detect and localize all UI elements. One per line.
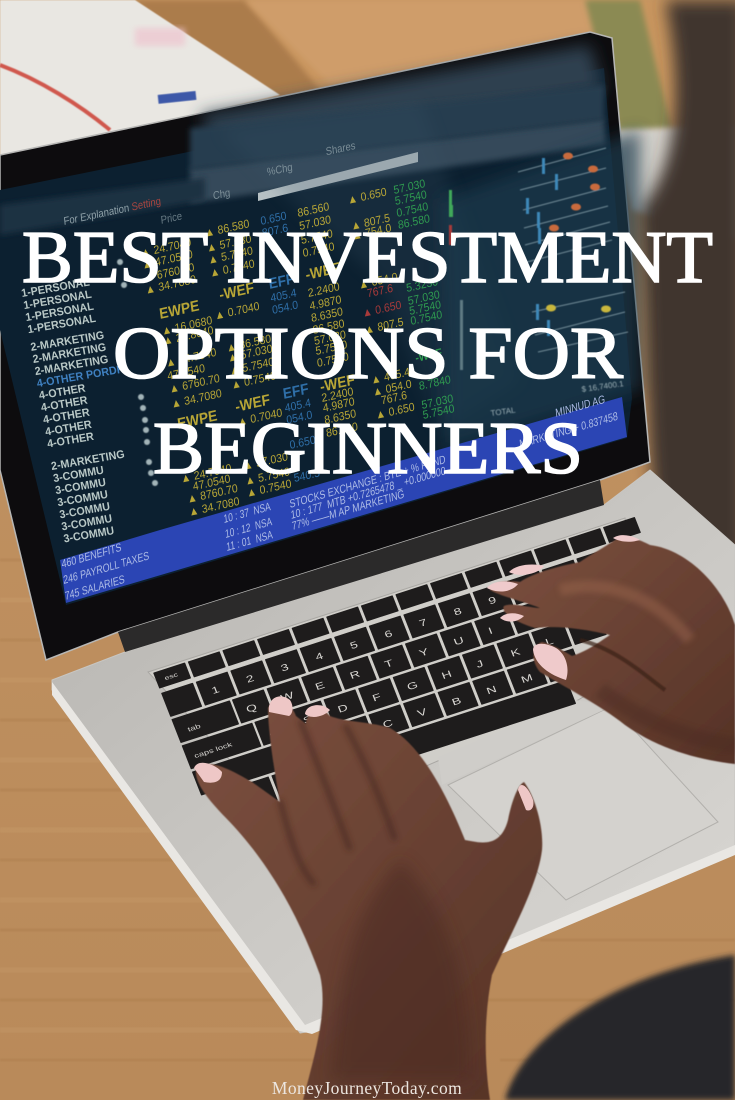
yellow figures: 8.6350: [310, 306, 344, 325]
header strip: [190, 118, 606, 203]
yellow figures: ▲ 5.7540: [244, 466, 291, 488]
blue ticker band: [60, 397, 627, 603]
yellow figures: ▲ 0.7540: [209, 258, 255, 280]
key letters: [163, 551, 589, 788]
account labels: 1-PERSONAL: [27, 313, 97, 336]
blurred dark hair at right: [640, 0, 735, 570]
green figures: [393, 178, 455, 422]
yellow figures: ▲ 0.650: [347, 186, 387, 207]
account labels: 4-OTHER: [42, 406, 91, 427]
bottom ticker text: 460 BENEFITS: [61, 542, 122, 571]
base front edge: [52, 682, 735, 1034]
title line 2: OPTIONS FOR: [113, 313, 624, 395]
green figures: 8.7840: [418, 374, 452, 393]
header labels: Chg: [212, 187, 231, 203]
account labels: 3-COMMU: [63, 525, 115, 546]
yellow figures: ▲ 86.580: [226, 333, 272, 355]
account labels: [20, 273, 151, 546]
yellow figures: 86.580: [325, 421, 359, 440]
yellow figures: ▲ 57.030: [206, 233, 252, 255]
bottom ticker text: 11 : 01 NSA: [226, 529, 274, 554]
yellow figures: ▲ 47.0540: [141, 248, 193, 272]
yellow figures: 2.2400: [321, 386, 354, 405]
right hand: [487, 535, 735, 764]
laptop base: [52, 470, 735, 1034]
title line 1: BEST INVESTMENT: [22, 217, 713, 299]
yellow figures: ▲ 24.7040: [140, 236, 192, 260]
account labels: 2-MARKETING: [30, 329, 105, 354]
yellow figures: EWPE: [176, 408, 219, 433]
yellow figures: ▲ 6760.70: [168, 372, 221, 396]
screen top bezel reflection: [200, 45, 603, 160]
yellow figures: ▲ 0.7040: [214, 300, 260, 323]
account labels: 1-PERSONAL: [20, 276, 91, 300]
bottom ticker text: MARKETING + 0.837458: [519, 411, 619, 451]
yellow figures: ▲ 0.650: [375, 401, 415, 422]
yellow figures: 57.030: [298, 214, 332, 233]
yellow figures: 2.2400: [307, 281, 340, 300]
finger shadows: [280, 720, 395, 885]
yellow figures: ▲ 054.0: [372, 378, 412, 399]
account labels: 4-OTHER: [46, 431, 95, 451]
account labels: 3-COMMU: [56, 489, 109, 509]
yellow figures: ▲ 754.0: [351, 222, 392, 243]
yellow figures: [140, 186, 415, 520]
scroll bar: [258, 152, 418, 201]
blue figures: 405.4: [284, 397, 312, 415]
keyboard well: [148, 518, 642, 825]
yellow figures: ▲ 807.5: [364, 316, 404, 337]
yellow figures: ▲ 054.0: [358, 271, 398, 292]
screen dots column: [117, 259, 158, 486]
yellow figures: ▲ 16.0680: [161, 314, 213, 338]
yellow figures: 4.9870: [309, 294, 342, 313]
yellow figures: -WEF: [305, 260, 341, 284]
yellow figures: EWPE: [158, 298, 201, 323]
account labels: 4-OTHER: [40, 394, 89, 414]
yellow figures: 4.9870: [322, 396, 355, 415]
bottom ticker text: 10 : 12 NSA: [225, 516, 273, 541]
left hand: [194, 696, 542, 1100]
white notebook paper: [0, 0, 280, 160]
account labels: 3-COMMU: [52, 464, 105, 485]
yellow figures: ▲ 0.7040: [237, 407, 283, 429]
yellow figures: 47.0540: [192, 473, 231, 494]
yellow figures: ▲ 34.7080: [188, 495, 240, 519]
hinge strip: [118, 480, 604, 652]
blue figures: 054.0: [286, 409, 313, 427]
bottom ticker text: 10 : 177 MTB +0.7265478 _ +0.000000: [290, 465, 446, 522]
account labels: 3-COMMU: [59, 501, 111, 521]
yellow figures: ▲ 5.7540: [207, 245, 254, 267]
yellow figures: ▲ 405.4: [370, 366, 411, 387]
header labels: Price: [160, 211, 183, 227]
blue figures: EFF: [268, 271, 295, 293]
yellow figures: ▲ 6760.70: [143, 261, 195, 285]
blue figures: EFF: [282, 381, 310, 403]
blue figures: 807.6: [261, 222, 289, 240]
yellow figures: 86.580: [312, 318, 345, 337]
bottom ticker text: 246 PAYROLL TAXES: [63, 550, 150, 587]
green figures: 0.7540: [396, 201, 429, 220]
green figures: 57.030: [421, 393, 454, 412]
header labels: [62, 140, 359, 247]
yellow figures: ▲ 57.030: [227, 343, 273, 365]
account labels: 2-MARKETING: [50, 448, 126, 473]
yellow figures: 86.560: [297, 201, 330, 220]
yellow figures: ▲ 8760.70: [186, 482, 239, 506]
keyboard keys: [154, 518, 692, 821]
dark sleeve at bottom right: [505, 955, 735, 1100]
yellow figures: 57.030: [313, 329, 347, 348]
yellow figures: 0.7540: [302, 241, 335, 260]
bottom ticker text: [61, 391, 619, 603]
yellow figures: -WEF: [319, 372, 356, 396]
bottom ticker text: MINNUD AG: [555, 394, 606, 420]
account labels: 4-OTHER PORDF: [36, 363, 124, 390]
green figures: 5.7540: [422, 403, 455, 422]
account labels: 4-OTHER: [38, 382, 86, 402]
yellow figures: -WEF: [218, 280, 255, 304]
blue figures: 0.650: [260, 210, 287, 228]
website footer: MoneyJourneyToday.com: [272, 1078, 462, 1098]
yellow figures: ▲ 20.8040: [162, 324, 214, 348]
background: blurred desk objects: [0, 0, 735, 240]
screen data: stock table: [20, 140, 619, 603]
green figures: 5.7540: [409, 299, 442, 318]
header labels: Shares: [325, 140, 356, 158]
yellow figures: ▲ 0.650: [361, 299, 402, 320]
account labels: 1-PERSONAL: [25, 300, 95, 324]
yellow figures: ▲ 5.7540: [229, 356, 275, 378]
header labels: %Chg: [267, 162, 293, 179]
title: [22, 217, 713, 490]
yellow figures: ▲ 57.030: [242, 451, 289, 473]
yellow figures: ▲ 86.580: [204, 218, 250, 240]
account labels: 4-OTHER: [44, 419, 93, 439]
green figures: -WEF: [415, 347, 443, 365]
account labels: 3-COMMU: [61, 513, 113, 533]
bottom ticker text: 77% ——M AP MARKETING: [291, 489, 405, 533]
green figures: 86.580: [397, 213, 431, 232]
green figures: 5.7540: [394, 189, 427, 208]
green figures: 57.030: [393, 178, 426, 197]
yellow figures: 5.7540: [315, 339, 348, 358]
yellow figures: 5.7540: [300, 228, 334, 247]
reflection on screen: [220, 100, 520, 430]
yellow figures: ▲ 24.7040: [165, 346, 217, 370]
yellow figures: ▲ 24.7040: [180, 462, 232, 486]
green figures: 57.030: [407, 289, 440, 308]
account labels: 3-COMMU: [54, 476, 107, 497]
screen display: [0, 68, 632, 605]
yellow figures: ▲ 34.7080: [170, 387, 223, 411]
account labels: 2-MARKETING: [34, 354, 109, 378]
yellow figures: 767.6: [366, 282, 394, 301]
slider chart on screen: [449, 148, 628, 418]
yellow figures: -WEF: [234, 392, 271, 416]
bottom ticker text: 745 SALARIES: [64, 574, 125, 603]
account labels: 1-PERSONAL: [23, 288, 93, 312]
header labels: For Explanation Setting: [63, 196, 162, 228]
yellow figures: ▲ 807.5: [350, 212, 391, 233]
yellow figures: ▲ 34.7080: [145, 273, 197, 297]
yellow figures: 767.6: [380, 389, 408, 408]
nails: [487, 535, 640, 680]
laptop lid: [0, 32, 650, 660]
green figures: 5.3230: [406, 276, 439, 295]
blue figures: 054.0: [271, 299, 299, 317]
yellow figures: 0.7540: [316, 351, 350, 370]
blue figures: 405.4: [270, 287, 297, 305]
blue figures: 0.650: [289, 434, 316, 452]
blue figures: [260, 210, 321, 485]
bottom ticker text: STOCKS EXCHANGE : BTE + % FUND: [289, 454, 446, 511]
yellow figures: 47.0540: [167, 362, 206, 383]
slider chart on screen: TOTAL: [490, 406, 517, 418]
green figures: 0.7540: [410, 309, 443, 328]
bottom ticker text: 10 : 37 NSA: [223, 501, 271, 526]
yellow figures: ▲ 0.7540: [230, 370, 277, 392]
title line 3: BEGINNERS: [153, 408, 583, 490]
palm rest line: [438, 700, 612, 785]
blue figures: 540.5: [293, 467, 321, 485]
slider chart on screen: $ 16,7400.1: [581, 379, 625, 394]
yellow figures: ▲ 0.7540: [246, 478, 292, 500]
nails: [194, 696, 533, 811]
trackpad: [448, 706, 718, 900]
knuckle highlights: [560, 587, 690, 640]
yellow figures: 8.6350: [324, 408, 357, 427]
account labels: 2-MARKETING: [32, 341, 107, 366]
